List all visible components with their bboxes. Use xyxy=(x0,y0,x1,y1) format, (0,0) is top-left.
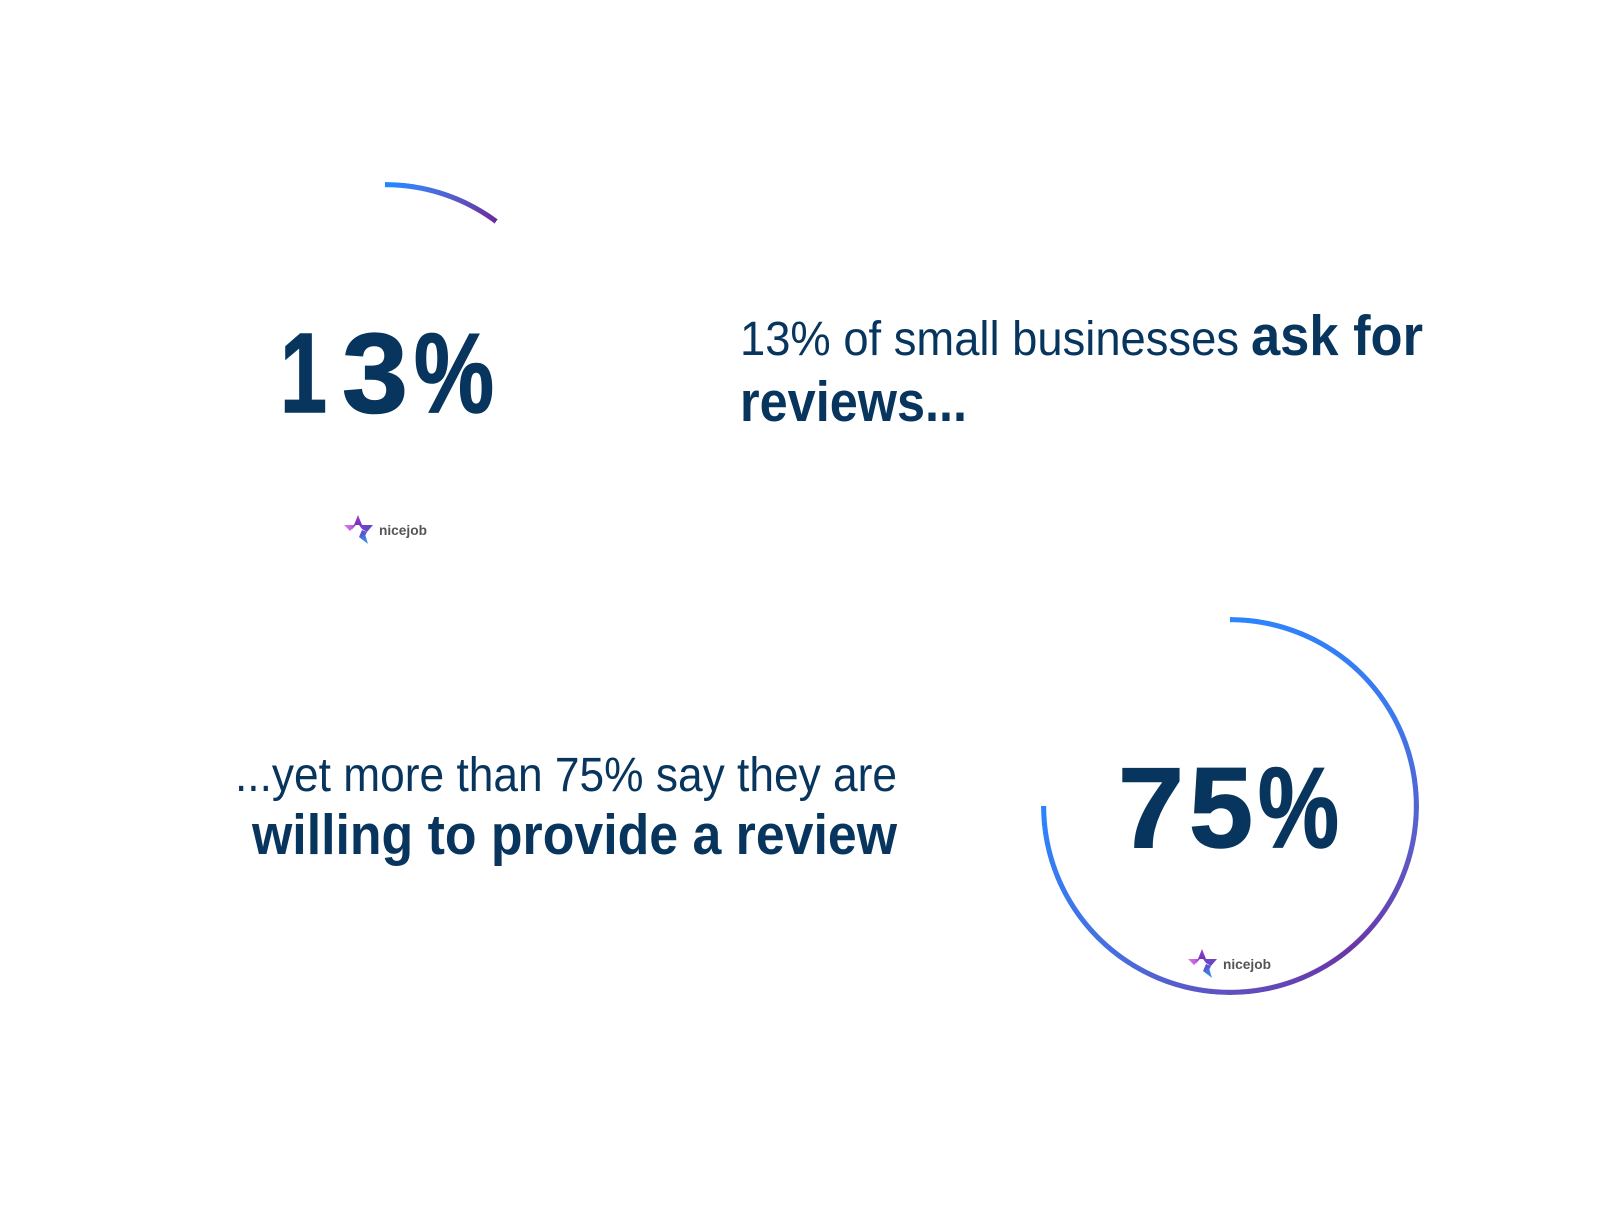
big stat: 75%: % xyxy=(1258,745,1339,872)
statement: 13% of small businesses ask for reviews: 13% of small businesses xyxy=(740,313,1239,366)
big stat: 75%: 7 xyxy=(1118,745,1184,872)
statement: 13% of small businesses ask for reviews xyxy=(740,304,1423,434)
logo: nicejob bottom: nicejob xyxy=(1223,957,1271,972)
ring: 75% progress arc xyxy=(1041,617,1419,995)
statement: 13% of small businesses ask for reviews: reviews... xyxy=(740,370,967,434)
big stat: 75% xyxy=(1118,745,1339,872)
logo: nicejob bottom xyxy=(1188,949,1271,978)
big stat: 75%: 5 xyxy=(1189,745,1253,872)
big stat: 13%: 1 xyxy=(280,310,327,436)
ring: 13% progress arc xyxy=(385,182,498,224)
statement: yet more than 75% willing to provide a review: willing to provide a review xyxy=(251,803,898,867)
big stat: 13%: % xyxy=(414,310,494,436)
statement: yet more than 75% willing to provide a review xyxy=(235,749,898,867)
big stat: 13%: 3 xyxy=(342,310,408,436)
logo: nicejob top: nicejob xyxy=(379,523,427,538)
statement: 13% of small businesses ask for reviews: ask for xyxy=(1251,304,1423,368)
logo: nicejob top xyxy=(344,515,427,544)
big stat: 13% xyxy=(280,310,494,436)
statement: yet more than 75% willing to provide a review: ...yet more than 75% say they are xyxy=(235,749,897,802)
